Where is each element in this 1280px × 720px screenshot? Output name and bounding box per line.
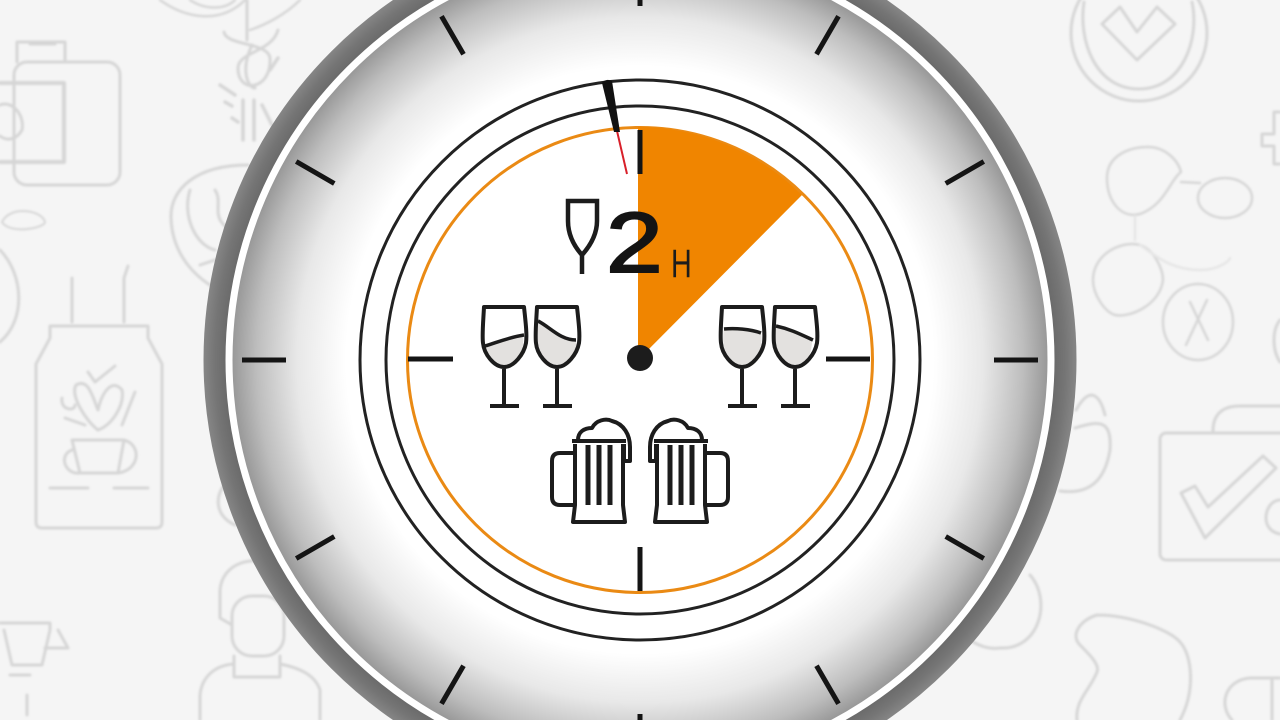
icon: small leaf behind clock	[218, 480, 235, 525]
beer mugs	[552, 420, 728, 522]
icon: plant jar	[36, 266, 162, 528]
icon: right edge circle	[1274, 320, 1280, 362]
icon: right edge cross	[1262, 112, 1280, 164]
wine glasses	[483, 307, 817, 406]
clock bezel	[215, 0, 1065, 720]
icon: linked circles	[1093, 147, 1252, 360]
outer dial rings	[360, 80, 920, 640]
icon: check badge	[1071, 0, 1207, 101]
icon: bowl	[1060, 395, 1110, 492]
hour ticks	[242, 0, 1038, 720]
icon: person	[200, 561, 320, 720]
icon: caduceus	[160, 0, 300, 140]
wine glass 1	[483, 307, 526, 406]
big 2: 2	[606, 195, 663, 290]
orange two-hour sector	[638, 127, 802, 358]
icon: left folder	[0, 42, 120, 229]
icon: single glass	[568, 201, 597, 274]
hour unit: H	[671, 241, 692, 286]
inner quarter ticks	[408, 130, 870, 591]
beer mug left	[552, 420, 630, 522]
red second hand	[617, 131, 627, 174]
wine glass 2	[536, 307, 579, 406]
icon: lower right oval	[1225, 678, 1280, 720]
icon: left partial circle	[0, 250, 19, 342]
beer mug right	[650, 420, 728, 522]
icon: small mug	[0, 623, 68, 715]
icon: lower clock blob	[970, 575, 1041, 648]
clock face	[228, 0, 1052, 720]
icon: check folder	[1160, 406, 1280, 560]
icon: brain leaf	[171, 165, 248, 285]
black needle	[602, 80, 620, 132]
orange dial ring	[408, 128, 872, 592]
wine glass 3	[721, 307, 764, 406]
hub	[627, 345, 653, 371]
glass liquid fills	[485, 321, 812, 367]
icon: lower blob	[1076, 615, 1191, 720]
wine glass 4	[774, 307, 817, 406]
white ring	[229, 0, 1051, 720]
liquid surfaces	[485, 321, 813, 346]
